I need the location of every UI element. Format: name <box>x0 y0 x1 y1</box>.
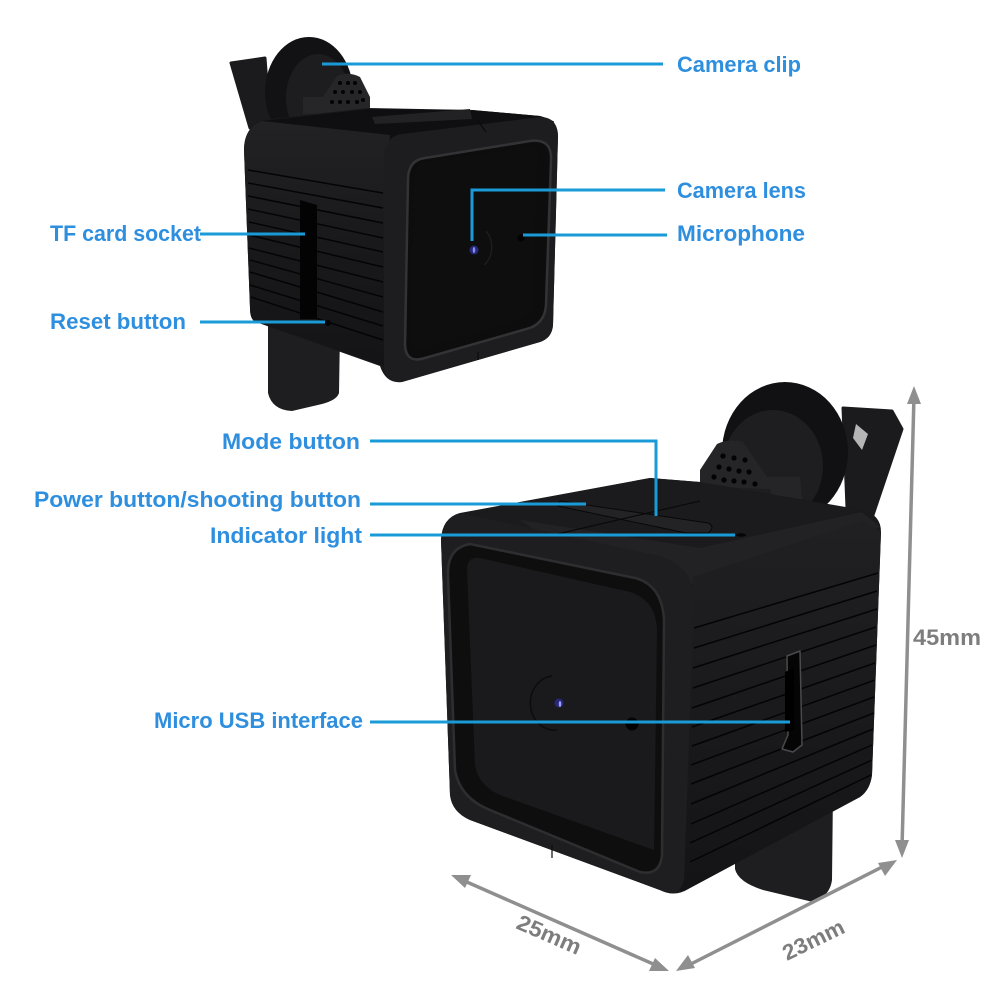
front seam <box>478 121 486 360</box>
label: Microphone: Microphone <box>677 221 805 246</box>
body silhouette <box>244 108 558 382</box>
camera lens <box>554 698 564 708</box>
lens ring <box>530 676 557 730</box>
clip plate <box>231 58 270 128</box>
lens ring <box>484 231 492 265</box>
camera view: front and side, lower <box>441 382 902 902</box>
dimension: 45mm: 45mm <box>913 625 981 650</box>
camera clip disc <box>722 382 848 522</box>
front bezel <box>384 117 558 382</box>
bottom clip <box>735 790 833 902</box>
bottom clip <box>268 300 340 411</box>
clip cutout <box>853 424 868 450</box>
top face <box>447 478 860 570</box>
arrow: 25mm width <box>451 875 669 971</box>
micro USB port <box>782 651 802 752</box>
lens glass panel <box>411 146 538 349</box>
shoulder highlight <box>520 512 880 585</box>
front rim <box>448 544 664 873</box>
lens highlight <box>473 247 475 253</box>
label: Camera clip: Camera clip <box>677 52 801 77</box>
arrow: 23mm depth <box>676 860 897 971</box>
camera view: front and side, upper <box>231 37 558 411</box>
arrow: 45mm height <box>895 386 921 858</box>
camera lens <box>470 246 478 254</box>
lens glass panel <box>467 558 657 850</box>
lens highlight <box>559 701 561 707</box>
label: Power button/shooting button: Power button/shooting button <box>34 487 361 512</box>
label: Mode button: Mode button <box>222 429 360 454</box>
microphone hole <box>518 234 524 242</box>
front rim <box>405 141 551 359</box>
grip pad <box>303 74 370 114</box>
top button <box>372 109 472 124</box>
body silhouette <box>441 478 881 894</box>
top face <box>262 110 553 142</box>
reset hole <box>325 320 331 326</box>
label: Micro USB interface: Micro USB interface <box>154 708 363 733</box>
label: Indicator light: Indicator light <box>210 523 363 548</box>
side face <box>244 121 390 366</box>
camera clip disc <box>265 37 353 147</box>
top seam <box>547 501 700 558</box>
side face <box>680 520 881 892</box>
dimension: 23mm: 23mm <box>778 914 849 965</box>
leader lines <box>200 64 790 722</box>
label: Camera lens: Camera lens <box>677 178 806 203</box>
dimension: 25mm: 25mm <box>513 910 585 960</box>
front bezel <box>441 513 694 893</box>
label: TF card socket: TF card socket <box>50 221 202 246</box>
side ridges <box>690 573 878 862</box>
indicator hole <box>736 533 746 537</box>
TF card slot <box>300 200 317 319</box>
label: Reset button: Reset button <box>50 309 186 334</box>
side ridges <box>248 170 383 340</box>
grip pad <box>700 440 802 501</box>
bottom seam <box>551 845 553 858</box>
top button <box>558 501 712 533</box>
microphone hole <box>626 718 638 730</box>
clip triangle <box>843 408 902 515</box>
